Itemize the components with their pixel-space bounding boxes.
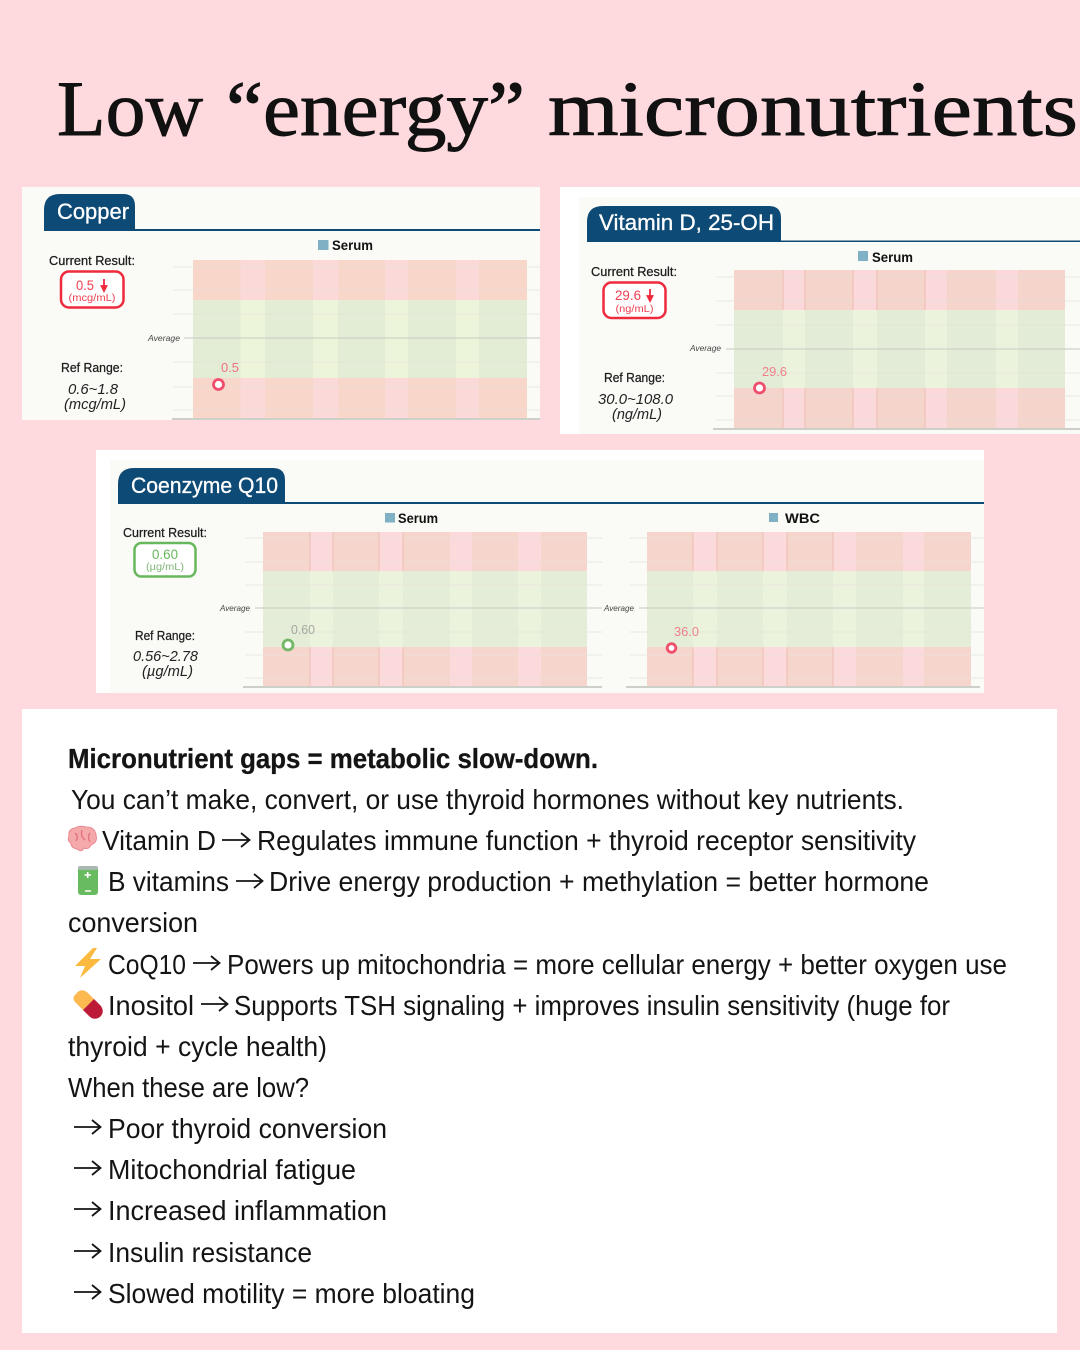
icon: capsule <box>74 990 103 1019</box>
copper range chart <box>147 260 540 419</box>
B vitamins line: Drive energy production + methylation = better hormone <box>269 866 929 897</box>
serum range chart: 0.60 <box>291 623 315 637</box>
vitamin D line: Vitamin D <box>102 825 216 856</box>
WBC range chart <box>603 532 984 687</box>
CoQ10 line: CoQ10 <box>108 949 186 980</box>
arrow <box>193 956 220 970</box>
subheading: when these are low: When these are low? <box>68 1072 309 1103</box>
title: Low <box>57 65 203 152</box>
copper serum legend: Serum <box>332 237 373 253</box>
copper current result <box>49 253 135 308</box>
coenzyme Q10 tab heading: Coenzyme Q10 <box>131 473 278 498</box>
vitamin D reference range: Ref Range: <box>604 370 665 385</box>
WBC legend: WBC <box>785 510 820 526</box>
inositol line: Supports TSH signaling + improves insulin sensitivity (huge for <box>234 990 950 1021</box>
list item: poor thyroid conversion: Poor thyroid conversion <box>108 1113 387 1144</box>
vitamin D range chart: 29.6 <box>762 365 787 379</box>
panel: explanation text <box>22 709 1057 1333</box>
list item: increased inflammation: Increased inflammation <box>108 1195 387 1226</box>
vitamin D tab heading <box>587 206 1080 242</box>
coenzyme Q10 reference range <box>133 628 199 680</box>
inositol line: Inositol <box>108 990 194 1021</box>
copper range chart: Average <box>147 333 180 343</box>
heading: micronutrient gaps: Micronutrient gaps = metabolic slow-down. <box>68 743 598 774</box>
arrow <box>201 997 228 1011</box>
vitamin D range chart: Average <box>689 343 721 353</box>
arrow <box>222 833 250 847</box>
title <box>57 65 1078 152</box>
coenzyme Q10 current result: 0.60 <box>152 547 178 562</box>
coenzyme Q10 current result: (µg/mL) <box>146 561 184 573</box>
icon: brain <box>68 826 96 851</box>
arrow <box>236 874 262 888</box>
vitamin D reference range <box>598 370 674 423</box>
vitamin D line: Regulates immune function + thyroid receptor sensitivity <box>257 825 916 856</box>
B vitamins line: B vitamins <box>108 866 229 897</box>
copper current result: 0.5 <box>76 277 94 293</box>
list item: slowed motility: Slowed motility = more bloating <box>108 1278 475 1309</box>
copper reference range <box>61 360 126 413</box>
panel: copper chart <box>22 187 540 420</box>
vitamin D serum legend: Serum <box>872 249 913 265</box>
copper current result: Current Result: <box>49 253 135 268</box>
serum legend: Serum <box>398 510 438 526</box>
panel: vitamin D chart <box>560 187 1080 434</box>
intro sentence: You can’t make, convert, or use thyroid hormones without key nutrients. <box>71 784 904 815</box>
serum range chart: Average <box>219 603 250 613</box>
copper range chart: 0.5 <box>221 361 239 375</box>
vitamin D current result: Current Result: <box>591 264 677 279</box>
vitamin D current result: (ng/mL) <box>616 303 654 315</box>
title: “energy” <box>226 65 525 152</box>
coenzyme Q10 current result: Current Result: <box>123 525 207 540</box>
copper current result: (mcg/mL) <box>68 292 116 304</box>
vitamin D reference range: 30.0~108.0 <box>598 391 674 408</box>
serum range chart <box>219 532 602 687</box>
copper tab heading: Copper <box>57 199 129 224</box>
copper reference range: (mcg/mL) <box>64 396 126 413</box>
copper reference range: 0.6~1.8 <box>68 381 119 398</box>
coenzyme Q10 current result <box>123 525 207 576</box>
vitamin D current result <box>591 264 677 318</box>
list item: mitochondrial fatigue: Mitochondrial fatigue <box>108 1154 356 1185</box>
WBC range chart: Average <box>603 603 634 613</box>
WBC legend <box>769 510 820 526</box>
list item: insulin resistance: Insulin resistance <box>108 1237 312 1268</box>
vitamin D current result: 29.6 <box>615 287 641 303</box>
coenzyme Q10 reference range: 0.56~2.78 <box>133 648 199 665</box>
vitamin D reference range: (ng/mL) <box>612 406 662 423</box>
icon: battery <box>78 866 98 895</box>
copper reference range: Ref Range: <box>61 360 123 375</box>
icon: lightning bolt <box>75 948 101 978</box>
CoQ10 line: Powers up mitochondria = more cellular energy + better oxygen use <box>227 949 1007 980</box>
panel: coenzyme Q10 chart <box>96 450 984 693</box>
title: micronutrients <box>548 65 1078 152</box>
coenzyme Q10 reference range: (µg/mL) <box>142 663 193 680</box>
B vitamins continuation: conversion <box>68 907 198 938</box>
coenzyme Q10 tab heading <box>118 468 984 504</box>
WBC range chart: 36.0 <box>674 625 699 639</box>
copper tab heading <box>44 194 540 231</box>
inositol continuation: thyroid + cycle health) <box>68 1031 327 1062</box>
vitamin D range chart <box>689 270 1080 429</box>
coenzyme Q10 reference range: Ref Range: <box>135 628 195 643</box>
vitamin D tab heading: Vitamin D, 25-OH <box>599 210 774 235</box>
